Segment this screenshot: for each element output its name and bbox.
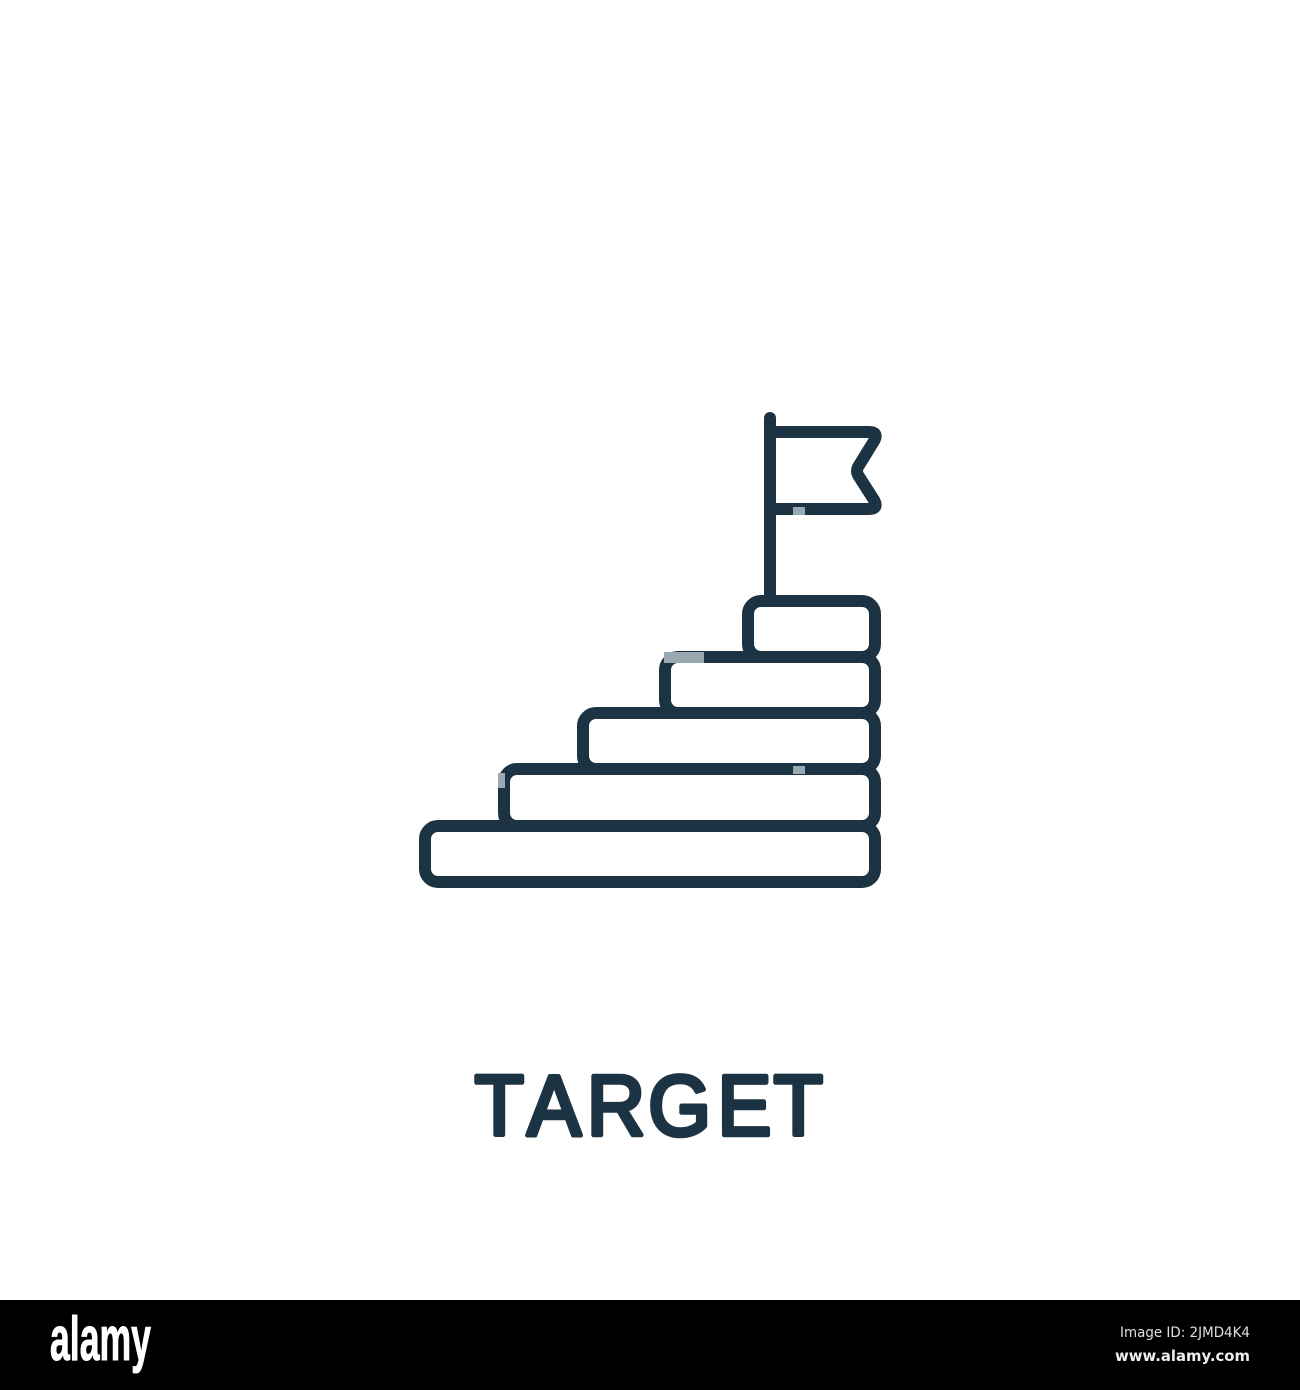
step 5 (top) xyxy=(748,601,875,657)
footer website: www.alamy.com xyxy=(1115,1347,1250,1365)
step 4 xyxy=(665,657,875,713)
footer logo: alamy: alamy xyxy=(50,1305,151,1374)
icon: flag xyxy=(770,432,876,509)
watermark fragments on icon xyxy=(498,507,805,788)
step 2 xyxy=(504,769,875,826)
footer image id: Image ID: 2JMD4K4 xyxy=(1120,1325,1250,1341)
step 1 (bottom) xyxy=(425,826,875,882)
icon: staircase with flag xyxy=(425,418,876,882)
icon: flag pole xyxy=(764,418,776,601)
title: TARGET: TARGET xyxy=(475,1058,823,1153)
footer bar xyxy=(0,1300,1300,1390)
step 3 xyxy=(583,713,875,769)
